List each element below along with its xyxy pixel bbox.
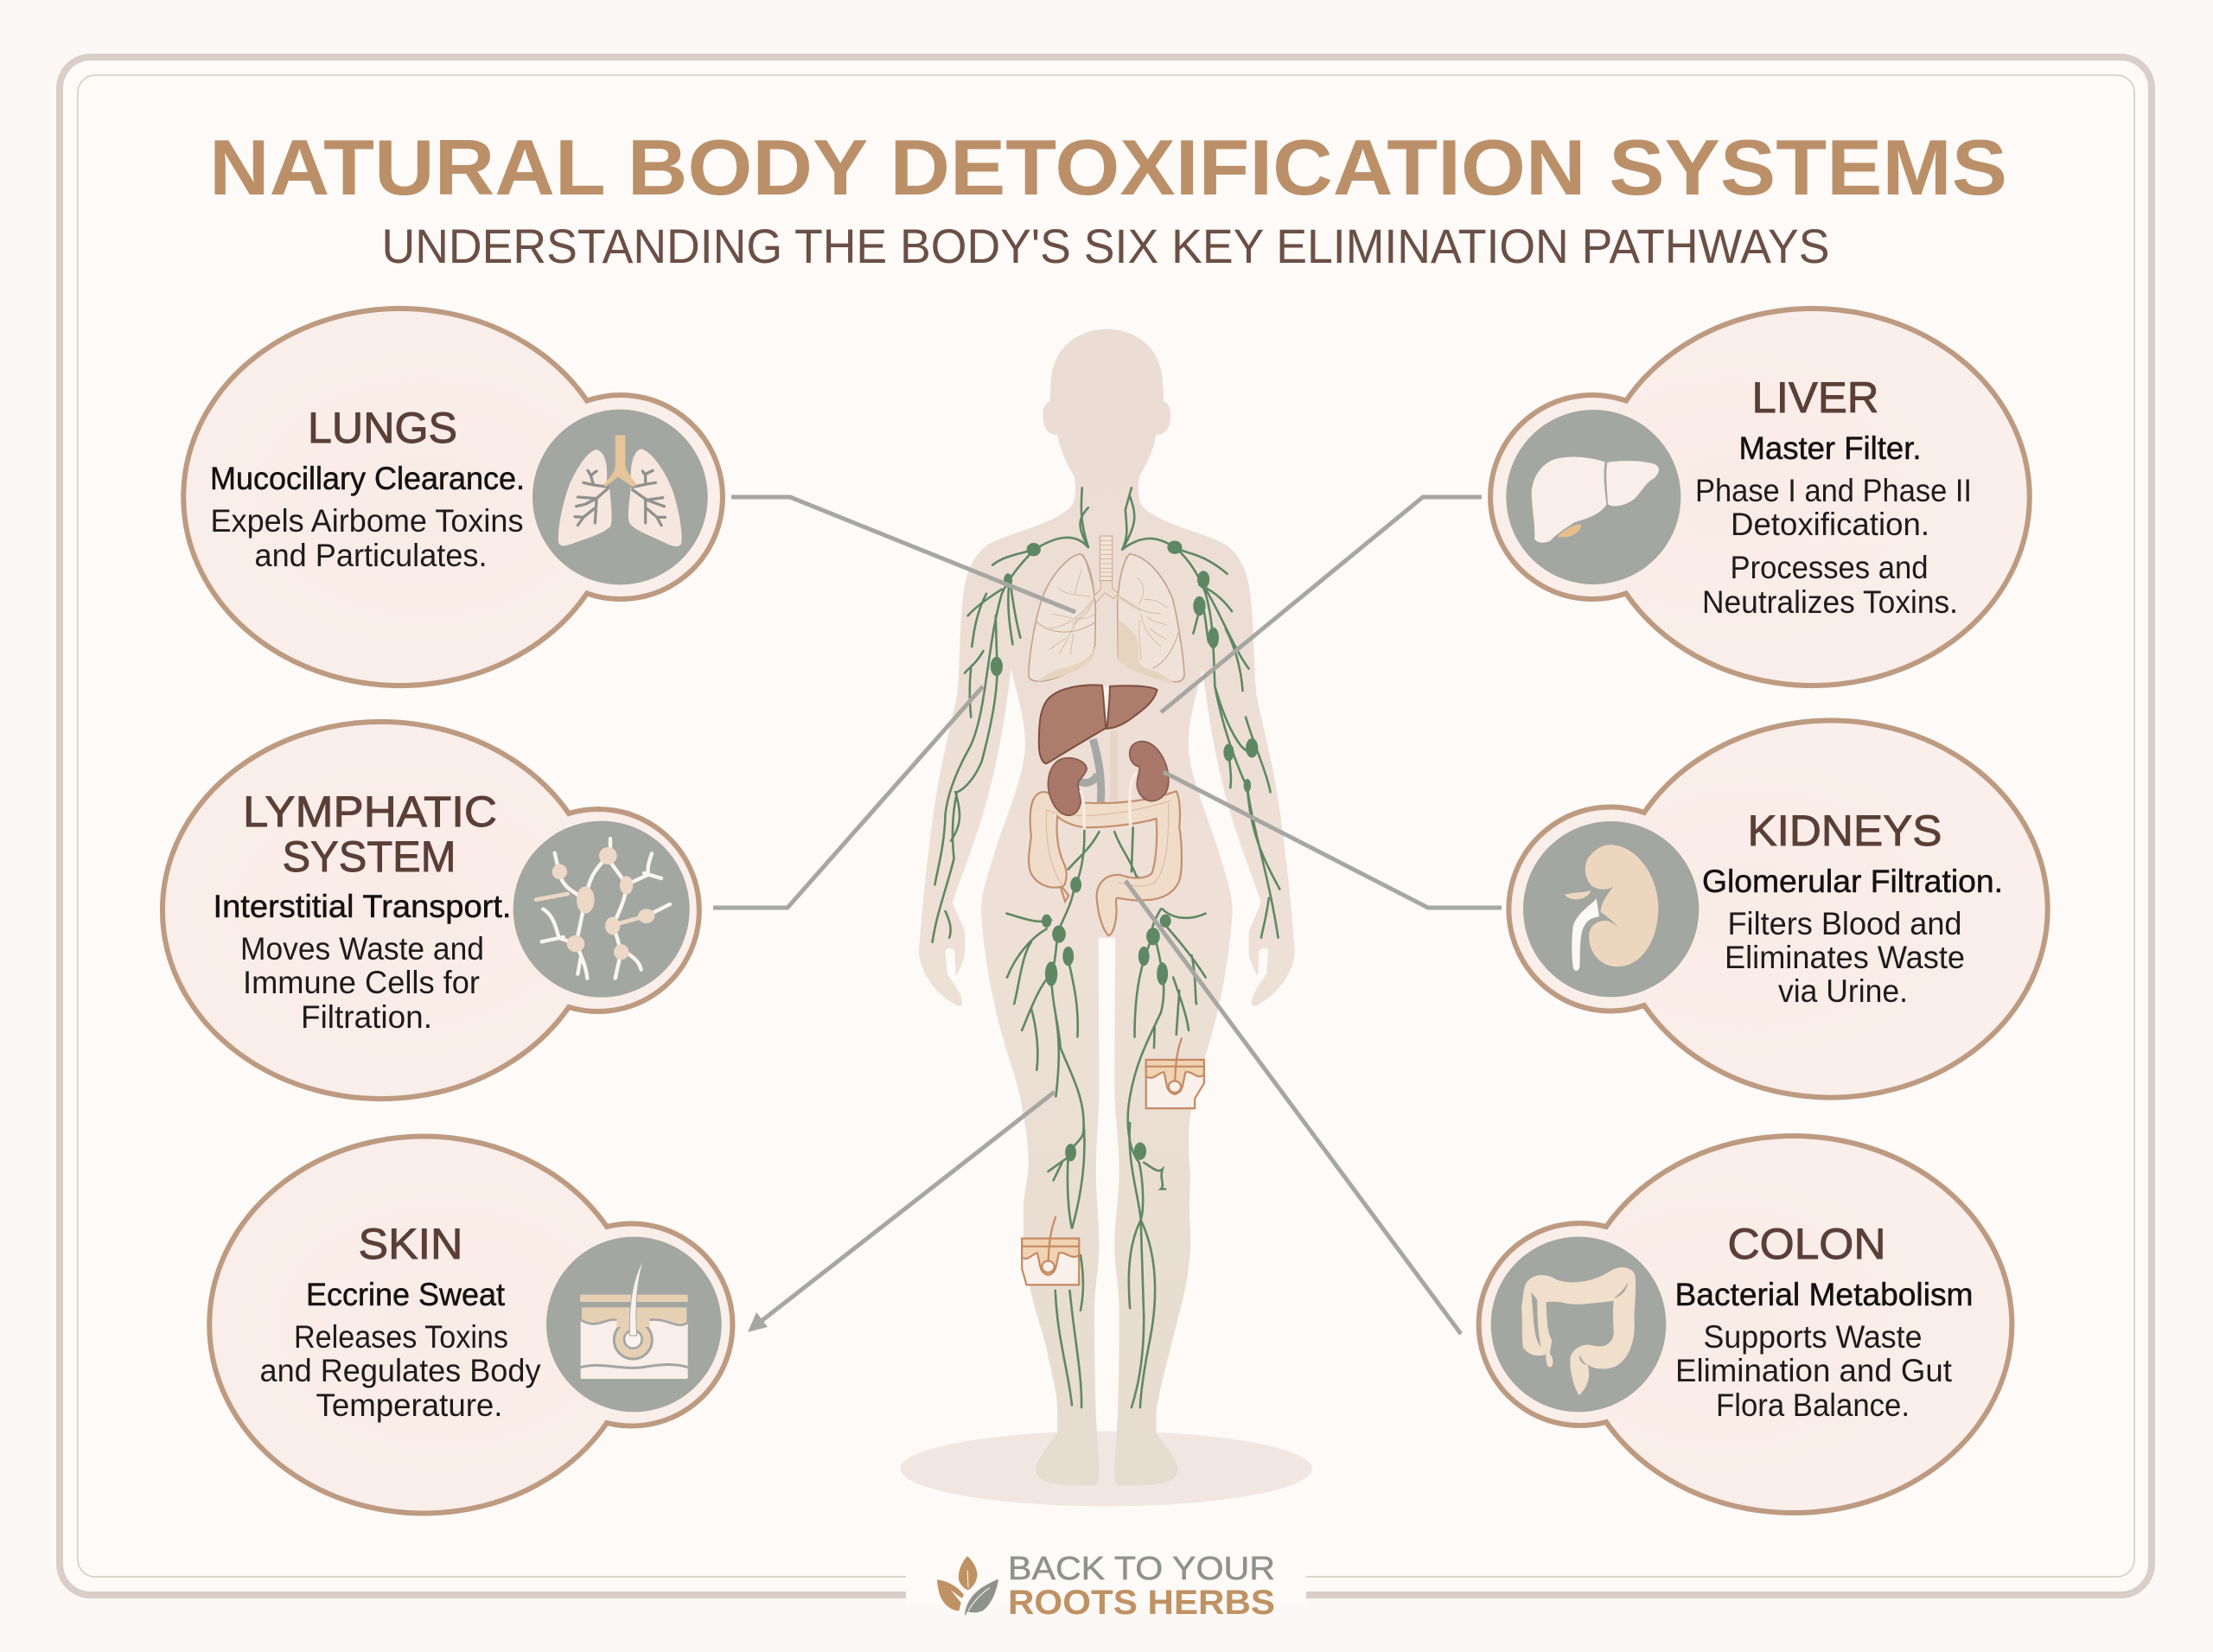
pointer line: colon xyxy=(1126,881,1461,1334)
title: NATURAL BODY DETOXIFICATION SYSTEMS xyxy=(209,124,2007,212)
description: Temperature. xyxy=(316,1387,503,1423)
heading: LUNGS xyxy=(308,404,457,452)
panel shape xyxy=(183,309,723,686)
organ: lungs xyxy=(1029,536,1184,682)
icon: liver xyxy=(1506,410,1680,584)
description: Moves Waste and xyxy=(240,931,484,966)
mechanism: Master Filter. xyxy=(1739,431,1921,466)
icon: skin cross-section xyxy=(546,1237,722,1412)
lymph lines xyxy=(933,488,1279,1407)
arrow: skin xyxy=(748,1092,1055,1332)
description xyxy=(1675,1319,1953,1423)
panel: kidneys xyxy=(1508,721,2048,1098)
pointer line: lungs xyxy=(731,497,1075,612)
lymph nodes xyxy=(991,541,1258,1161)
heading: LYMPHATIC xyxy=(243,788,497,836)
heading: SYSTEM xyxy=(282,832,456,881)
description xyxy=(240,931,484,1035)
heading: COLON xyxy=(1727,1220,1886,1268)
description: Immune Cells for xyxy=(243,965,480,1000)
skin patch on shin xyxy=(1022,1216,1079,1285)
description xyxy=(1695,473,1972,620)
mechanism: Bacterial Metabolism xyxy=(1675,1277,1973,1312)
mechanism: Interstitial Transport. xyxy=(213,889,512,924)
heading xyxy=(243,788,497,881)
description: via Urine. xyxy=(1778,973,1908,1009)
description: Neutralizes Toxins. xyxy=(1702,584,1958,620)
panel shape xyxy=(1490,309,2030,686)
panel shape xyxy=(163,722,699,1099)
logo text: BACK TO YOUR xyxy=(1008,1551,1275,1587)
description xyxy=(1725,906,1965,1009)
description: Detoxification. xyxy=(1731,507,1929,542)
mechanism: Eccrine Sweat xyxy=(306,1277,506,1312)
ureters xyxy=(1081,772,1137,830)
mechanism: Mucocillary Clearance. xyxy=(210,461,525,496)
icon: lymph network xyxy=(513,821,690,998)
description: Filtration. xyxy=(301,999,432,1035)
panel shape xyxy=(1479,1136,2012,1513)
description: Elimination and Gut xyxy=(1675,1353,1953,1388)
description: Supports Waste xyxy=(1703,1319,1923,1355)
kidneys xyxy=(1048,742,1169,815)
description: Expels Airbome Toxins xyxy=(211,503,524,539)
ground shadow xyxy=(900,1432,1312,1506)
description: and Particulates. xyxy=(254,538,488,573)
vessels: vena cava xyxy=(1110,730,1118,801)
lymphatic vessels xyxy=(933,488,1279,1407)
icon: leaves xyxy=(937,1556,998,1616)
panel: lymphatic system xyxy=(163,722,699,1099)
panel: skin xyxy=(209,1136,732,1513)
heading: KIDNEYS xyxy=(1748,807,1942,855)
logo text: ROOTS HERBS xyxy=(1008,1584,1275,1622)
description: Flora Balance. xyxy=(1716,1387,1910,1423)
silhouette xyxy=(919,329,1295,1485)
description: Releases Toxins xyxy=(294,1319,508,1355)
mechanism: Glomerular Filtration. xyxy=(1702,864,2003,899)
pointer line: kidneys xyxy=(1164,772,1502,908)
panel shape xyxy=(1508,721,2048,1098)
description: Filters Blood and xyxy=(1727,906,1962,941)
icon: colon xyxy=(1491,1237,1666,1412)
description xyxy=(211,503,524,573)
heading: LIVER xyxy=(1751,373,1879,422)
description xyxy=(259,1319,541,1423)
panel shape xyxy=(209,1136,732,1513)
vessels: aorta xyxy=(1079,739,1101,803)
pointer line: lymphatic xyxy=(713,686,983,908)
liver xyxy=(1039,685,1158,763)
subtitle: UNDERSTANDING THE BODY'S SIX KEY ELIMINATION PATHWAYS xyxy=(382,219,1829,273)
heading: SKIN xyxy=(358,1220,463,1268)
panel: colon xyxy=(1479,1136,2012,1513)
panel: lungs xyxy=(183,309,723,686)
pointer line: liver xyxy=(1161,497,1482,712)
panel: liver xyxy=(1490,309,2030,686)
description: Processes and xyxy=(1731,550,1928,585)
description: Eliminates Waste xyxy=(1725,940,1965,975)
skin patch on thigh xyxy=(1146,1038,1204,1108)
body figure with organs xyxy=(900,329,1312,1506)
logo xyxy=(937,1551,1275,1622)
icon: lungs xyxy=(533,410,708,584)
description: Phase I and Phase II xyxy=(1695,473,1972,508)
description: and Regulates Body xyxy=(259,1353,541,1388)
icon: kidney xyxy=(1523,821,1699,997)
colon xyxy=(1029,791,1182,935)
